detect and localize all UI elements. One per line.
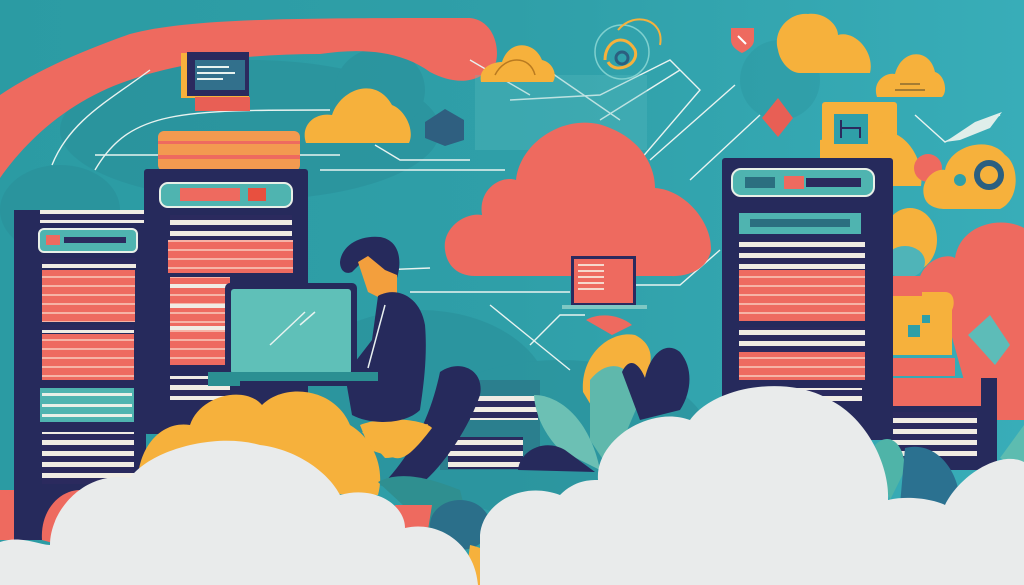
rack far right: [890, 358, 997, 470]
face: [358, 256, 397, 298]
chair tail: [362, 424, 428, 458]
body: [345, 292, 426, 422]
big red cloud: [445, 123, 711, 276]
white cursor shape: [945, 112, 1002, 142]
person: [340, 237, 481, 485]
foreground teal shapes: [0, 425, 1024, 585]
big laptop: [208, 283, 385, 386]
small laptop: [562, 256, 647, 309]
yellow gear cloud: [923, 144, 1016, 209]
yellow cloud small right: [876, 54, 945, 97]
glass panel: [475, 75, 647, 150]
centre-left rack: [144, 169, 308, 434]
white cloud left: [0, 441, 478, 585]
top centre yellow cloud: [481, 45, 555, 82]
shields: [731, 28, 754, 53]
right rack: [722, 158, 893, 440]
red swoosh: [0, 18, 497, 178]
small window top: [181, 52, 250, 111]
plant: [518, 348, 689, 472]
red cloud right small: [914, 154, 942, 182]
far right red cloud: [918, 222, 1024, 420]
red drop: [762, 98, 793, 137]
chair: [385, 366, 481, 485]
yellow cloud top right: [777, 14, 871, 73]
yellow cloud behind white: [138, 391, 380, 495]
left rack: [14, 210, 146, 540]
right yellow blobs: [883, 208, 1010, 365]
circular icon: [595, 19, 661, 79]
white cloud right: [480, 386, 1024, 585]
circuit lines: [52, 60, 1000, 370]
dark hexagon: [425, 109, 464, 146]
chair seat: [360, 419, 432, 458]
yellow square card: [820, 102, 921, 186]
red leaf: [586, 315, 632, 335]
mid rows behind person: [440, 380, 540, 470]
yellow cloud top centre: [305, 88, 411, 143]
hair: [340, 237, 399, 278]
dark teal background haze: [0, 40, 820, 520]
plant yellow: [583, 334, 651, 420]
left rack top band: [158, 131, 300, 171]
